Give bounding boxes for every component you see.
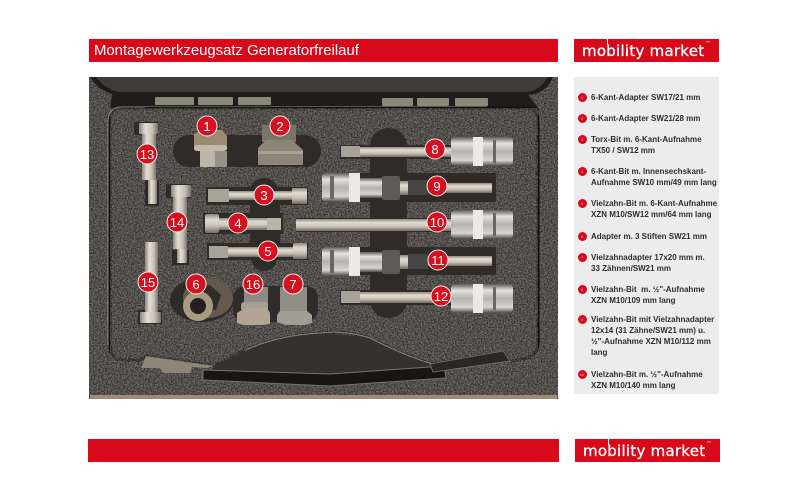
tool 3 <box>208 188 307 204</box>
tool 16 <box>237 287 270 325</box>
title bar <box>89 39 558 62</box>
number badges: 7 <box>289 277 297 292</box>
tool 10 <box>296 210 513 239</box>
legend item 4: 4 <box>581 169 583 174</box>
legend item 10: XZN M10/140 mm lang <box>591 381 675 390</box>
tool 1 <box>194 130 227 167</box>
legend item 7: 7 <box>581 254 583 260</box>
legend item 4 <box>578 167 717 187</box>
number badges: 14 <box>170 215 184 230</box>
legend item 9: Vielzahn-Bit mit Vielzahnadapter <box>591 315 714 324</box>
tool 12 <box>341 284 513 313</box>
tool 8 <box>341 137 513 166</box>
legend item 8 <box>578 284 705 304</box>
legend item 7: Vielzahnadapter 17x20 mm m. <box>591 252 705 262</box>
number badges: 13 <box>140 147 154 162</box>
number badges <box>137 116 451 306</box>
foam pockets <box>134 122 496 324</box>
number badges: 15 <box>141 275 155 290</box>
legend item 7 <box>578 252 705 272</box>
case lid <box>89 77 553 110</box>
legend item 5 <box>578 199 717 219</box>
photo: tool case with numbered tools <box>89 77 558 399</box>
tool 14 <box>171 185 191 263</box>
number badges: 2 <box>276 119 284 134</box>
number badges: 12 <box>434 289 448 304</box>
tool 11 <box>322 247 492 276</box>
tool 13 <box>139 123 158 204</box>
number badges: 8 <box>431 142 439 157</box>
logo: top: mobility market <box>582 42 704 60</box>
number badges: 1 <box>203 119 211 134</box>
legend item 3: 3 <box>581 137 583 142</box>
legend item 5: Vielzahn-Bit m. 6-Kant-Aufnahme <box>591 199 717 208</box>
legend panel <box>574 77 719 394</box>
logo: top <box>574 39 719 62</box>
legend item 8: XZN M10/109 mm lang <box>591 296 675 304</box>
legend item 3: Torx-Bit m. 6-Kant-Aufnahme <box>591 135 702 144</box>
legend item 10: Vielzahn-Bit m. ½"-Aufnahme <box>591 370 703 379</box>
legend item 1: 1 <box>581 94 583 100</box>
legend item 2: 6-Kant-Adapter SW21/28 mm <box>591 114 700 123</box>
legend item 5: 5 <box>581 201 583 206</box>
legend item 9 <box>578 315 714 357</box>
number badges: 10 <box>430 215 444 230</box>
legend item 1: 6-Kant-Adapter SW17/21 mm <box>591 92 700 102</box>
legend item 9: ½"-Aufnahme XZN M10/112 mm <box>591 337 711 346</box>
number badges: 4 <box>234 216 242 231</box>
tool 7 <box>277 287 312 325</box>
legend item 9: lang <box>591 348 607 357</box>
legend item 5: XZN M10/SW12 mm/64 mm lang <box>591 210 711 219</box>
logo: bottom <box>575 439 720 462</box>
tool 6 <box>183 278 233 321</box>
logo: bottom: mobility market <box>583 442 705 460</box>
logo: bottom: ™ <box>707 440 711 445</box>
legend item 7: 33 Zähnen/SW21 mm <box>591 264 671 272</box>
legend item 9: 9 <box>581 317 583 322</box>
legend item 10 <box>578 370 703 390</box>
legend item 4: 6-Kant-Bit m. Innensechskant- <box>591 167 706 176</box>
number badges: 5 <box>264 244 272 259</box>
legend item 8: 8 <box>581 286 583 292</box>
number badges: 3 <box>260 188 268 203</box>
legend item 10: 10 <box>580 372 584 377</box>
tool 4 <box>205 214 281 233</box>
inner foam tray <box>108 107 538 366</box>
number badges: 11 <box>431 253 445 268</box>
hinges <box>145 97 488 108</box>
number badges: 9 <box>433 179 441 194</box>
legend item 6: 6 <box>581 234 583 238</box>
logo: top: ™ <box>706 40 710 45</box>
legend item 2: 2 <box>581 116 583 121</box>
legend item 6: Adapter m. 3 Stiften SW21 mm <box>591 232 707 240</box>
number badges: 6 <box>192 277 200 292</box>
legend item 3: TX50 / SW12 mm <box>591 146 655 155</box>
case handle <box>90 332 557 399</box>
footer bar <box>88 439 559 462</box>
tool 2 <box>258 125 303 165</box>
legend item 4: Aufnahme SW10 mm/49 mm lang <box>591 178 717 187</box>
tool 9 <box>322 173 492 202</box>
outer foam <box>89 77 558 399</box>
tool 15 <box>140 242 161 323</box>
legend item 3 <box>578 135 702 155</box>
legend item 9: 12x14 (31 Zähne/SW21 mm) u. <box>591 326 705 335</box>
tool 5 <box>209 243 307 259</box>
number badges: 16 <box>246 277 260 292</box>
legend item 8: Vielzahn-Bit m. ½"-Aufnahme <box>591 284 705 294</box>
title bar: Montagewerkzeugsatz Generatorfreilauf <box>94 43 359 59</box>
